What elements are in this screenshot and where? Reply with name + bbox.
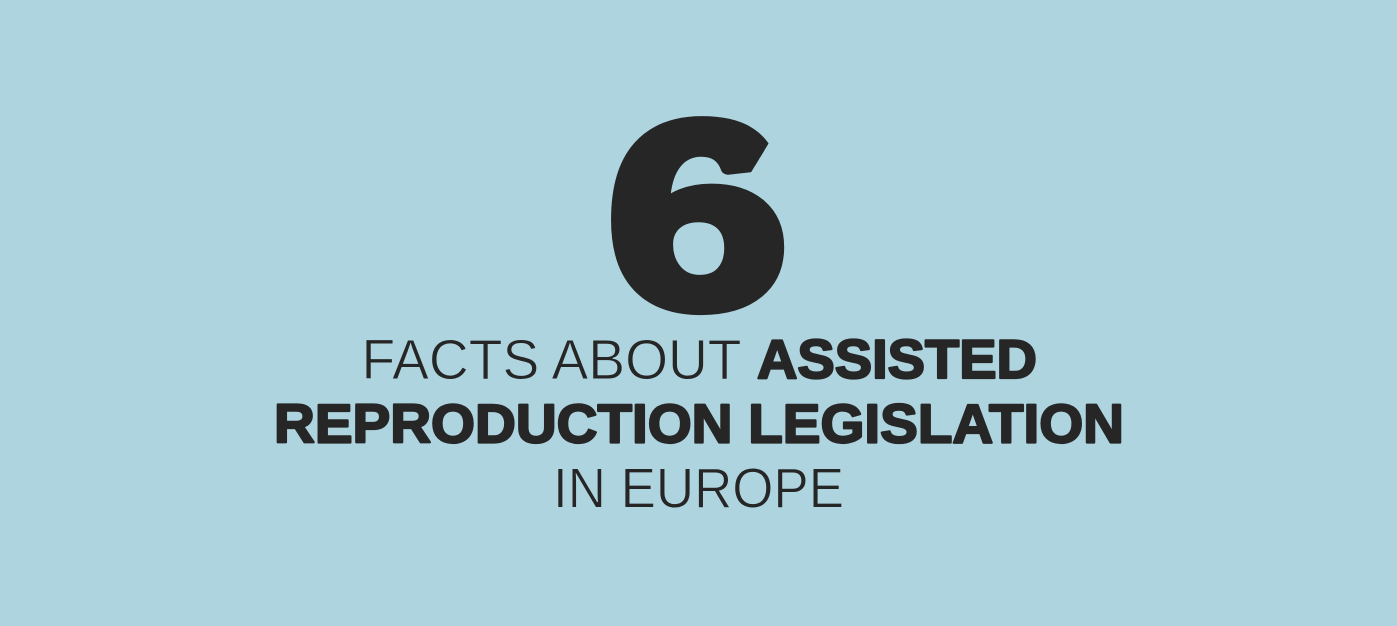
title line 1: FACTS ABOUT bbox=[362, 328, 742, 392]
title line 2: REPRODUCTION LEGISLATION bbox=[274, 392, 1124, 454]
infographic canvas bbox=[276, 116, 1122, 508]
big number 6: 6 bbox=[606, 69, 789, 363]
title line 1: ASSISTED bbox=[757, 328, 1037, 390]
title line 1 bbox=[362, 328, 1037, 392]
title line 3: IN EUROPE bbox=[553, 456, 844, 520]
title bbox=[274, 328, 1124, 520]
